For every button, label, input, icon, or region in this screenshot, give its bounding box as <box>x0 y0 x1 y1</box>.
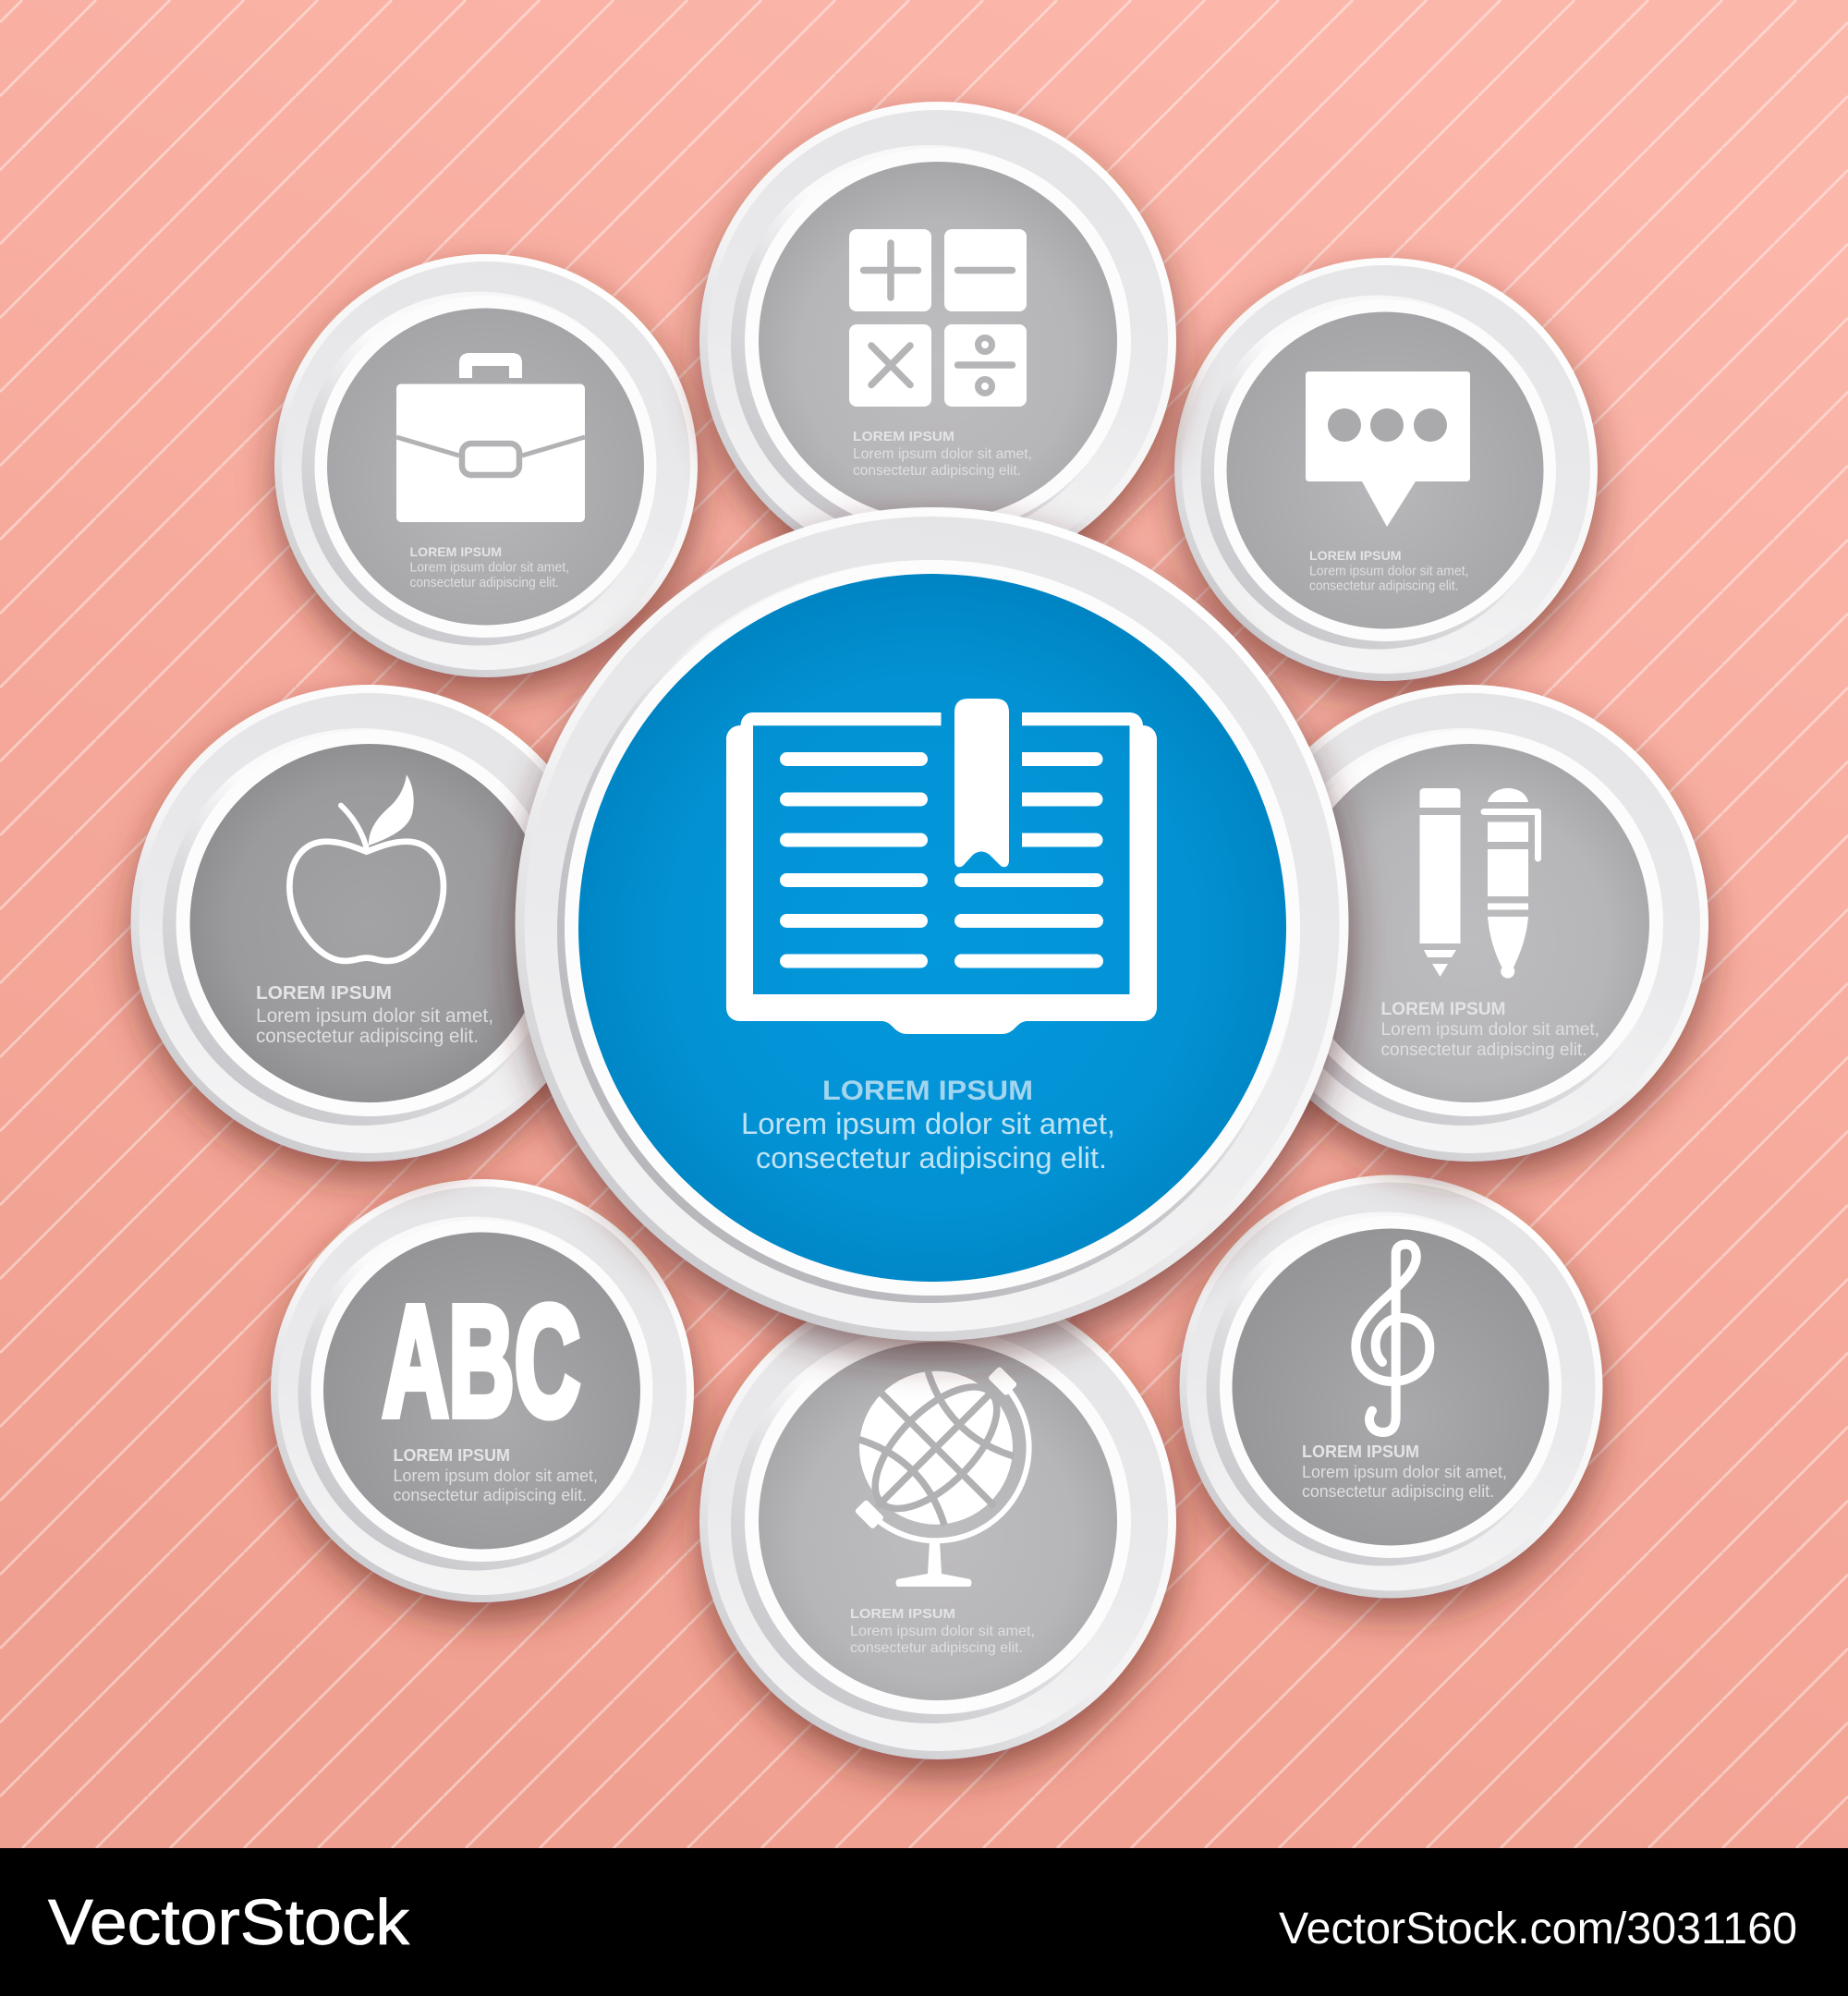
text: calculator caption <box>853 429 1032 479</box>
panel: apple circle <box>131 685 609 1178</box>
panel: speech bubble circle <box>1174 258 1599 698</box>
text: central caption: Lorem ipsum dolor sit amet, <box>741 1107 1115 1140</box>
panel: treble clef circle <box>1179 1175 1604 1614</box>
text: calculator caption: LOREM IPSUM <box>853 429 954 444</box>
text: ABC caption: LOREM IPSUM <box>394 1446 510 1465</box>
text: speech caption <box>1309 548 1469 593</box>
text: briefcase caption: Lorem ipsum dolor sit amet, <box>410 560 569 575</box>
panel: central book circle <box>516 507 1351 1358</box>
text: clef caption: Lorem ipsum dolor sit amet, <box>1302 1462 1507 1481</box>
icon: speech bubble <box>1306 371 1470 527</box>
text: apple caption <box>256 983 493 1047</box>
text: speech caption: LOREM IPSUM <box>1309 548 1401 563</box>
text: ABC caption <box>394 1446 598 1504</box>
panel: briefcase circle <box>274 254 699 694</box>
panel: globe circle <box>699 1283 1177 1776</box>
text: apple caption: Lorem ipsum dolor sit amet, <box>256 1005 493 1027</box>
text: apple caption: LOREM IPSUM <box>256 983 392 1004</box>
text: briefcase caption: consectetur adipiscing elit. <box>410 575 559 590</box>
panel: calculator circle <box>699 102 1177 595</box>
text: pen caption: LOREM IPSUM <box>1380 1000 1506 1019</box>
panel: pen and pencil circle <box>1232 685 1709 1178</box>
text: ABC caption: Lorem ipsum dolor sit amet, <box>394 1466 598 1485</box>
text: speech caption: Lorem ipsum dolor sit amet, <box>1309 564 1469 578</box>
text: calculator caption: Lorem ipsum dolor sit amet, <box>853 446 1032 462</box>
icon: globe <box>805 1317 1067 1587</box>
text: central caption: consectetur adipiscing elit. <box>756 1141 1107 1174</box>
text: pen caption: Lorem ipsum dolor sit amet, <box>1380 1019 1599 1040</box>
text: central caption: LOREM IPSUM <box>822 1076 1033 1106</box>
icon: apple <box>289 774 444 961</box>
text: clef caption <box>1302 1442 1507 1501</box>
icon: open book <box>726 699 1157 1034</box>
panel: ABC circle <box>271 1179 696 1619</box>
icon: briefcase <box>396 353 585 522</box>
footer url text: VectorStock.com/3031160 <box>1279 1905 1797 1953</box>
footer: watermark bar <box>0 1848 1848 1996</box>
text: globe caption: consectetur adipiscing elit. <box>850 1640 1023 1656</box>
text: central caption <box>741 1076 1115 1174</box>
icon: pencil and pen <box>1419 788 1541 979</box>
text: ABC caption: consectetur adipiscing elit. <box>394 1485 587 1504</box>
icon: treble clef <box>1356 1245 1429 1432</box>
text: clef caption: consectetur adipiscing elit. <box>1302 1481 1494 1501</box>
text: globe caption <box>850 1606 1035 1656</box>
text: speech caption: consectetur adipiscing elit. <box>1309 578 1458 593</box>
icon: ABC letters: ABC <box>383 1273 580 1449</box>
text: pen caption <box>1380 1000 1599 1060</box>
text: globe caption: Lorem ipsum dolor sit amet, <box>850 1624 1035 1639</box>
text: briefcase caption <box>410 544 569 590</box>
text: briefcase caption: LOREM IPSUM <box>410 544 502 559</box>
footer logo text: VectorStock <box>48 1886 410 1958</box>
text: apple caption: consectetur adipiscing elit. <box>256 1026 479 1047</box>
text: clef caption: LOREM IPSUM <box>1302 1442 1419 1461</box>
text: pen caption: consectetur adipiscing elit. <box>1380 1040 1587 1060</box>
text: globe caption: LOREM IPSUM <box>850 1606 955 1622</box>
icon: math operators <box>849 229 1027 407</box>
text: calculator caption: consectetur adipiscing elit. <box>853 463 1021 479</box>
